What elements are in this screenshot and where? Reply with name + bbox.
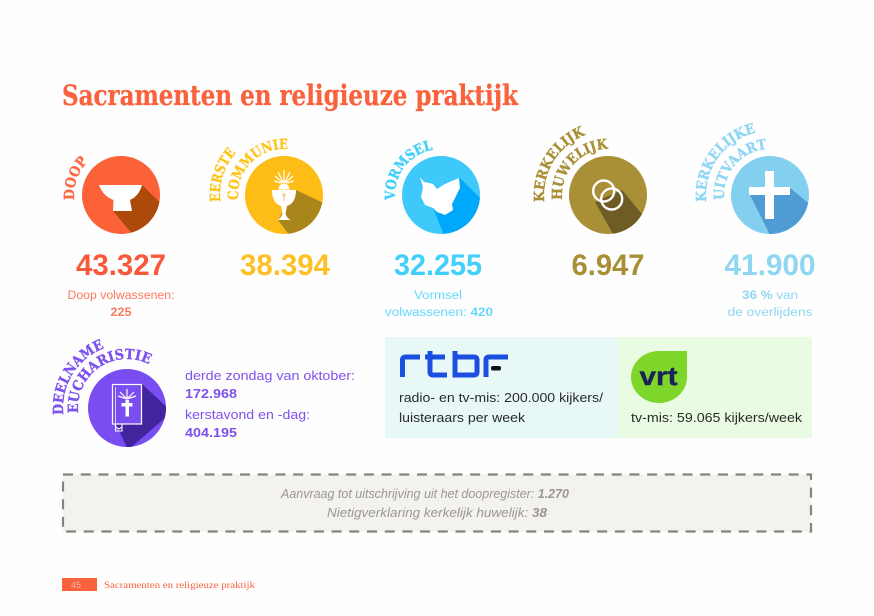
callout: doopregister en nietigverklaring: Aanvraag tot uitschrijving uit het doopregister: 1.270: [280, 487, 569, 501]
icon: chalice: [245, 156, 323, 234]
note: vormsel volwassenen: [385, 290, 493, 319]
icon: vrt logo: vrt: [640, 361, 678, 391]
panel: kerkelijke uitvaart: [696, 122, 816, 319]
icon: vrt logo: [631, 351, 687, 403]
note: percentage overlijdens: 36 % van: [742, 290, 798, 302]
number: kerkelijk huwelijk: 6.947: [572, 249, 644, 282]
icon: dove: [402, 156, 480, 234]
text: rtbf figures: luisteraars per week: [399, 410, 526, 425]
number: doop: 43.327: [76, 249, 166, 282]
text: rtbf figures: radio- en tv-mis: 200.000 kijkers/: [399, 390, 603, 405]
footer: 45: [71, 580, 81, 590]
label: deelname eucharistie: EUCHARISTIE: [68, 348, 152, 413]
note: percentage overlijdens: [728, 290, 813, 319]
panel: kerkelijk huwelijk: [534, 126, 647, 282]
callout: doopregister en nietigverklaring: Nietigverklaring kerkelijk huwelijk: 38: [327, 506, 547, 520]
footer: [62, 578, 256, 591]
text: attendance figures: 404.195: [185, 425, 237, 440]
panel: vormsel: [384, 140, 493, 319]
number: eerste communie: 38.394: [240, 249, 330, 282]
panel: eerste communie: [210, 138, 330, 282]
label: kerkelijk huwelijk: KERKELIJK: [534, 126, 586, 202]
text: vrt figures: tv-mis: 59.065 kijkers/week: [631, 410, 803, 425]
icon: cross: [731, 156, 809, 234]
note: vormsel volwassenen: Vormsel: [414, 290, 462, 302]
title: Sacramenten en religieuze praktijk: [62, 79, 518, 112]
text: attendance figures: derde zondag van oktober:: [185, 368, 355, 383]
label: kerkelijk huwelijk: [534, 126, 608, 202]
label: eerste communie: EERSTE: [210, 146, 236, 202]
panel: deelname eucharistie: [52, 338, 355, 447]
text: rtbf figures: [399, 390, 603, 425]
panel: vrt: [618, 337, 812, 438]
note: doop volwassenen: Doop volwassenen:: [68, 290, 174, 302]
text: attendance figures: [185, 368, 355, 440]
panel: rtbf: [385, 337, 618, 438]
note: vormsel volwassenen: volwassenen: 420: [385, 307, 493, 319]
label: kerkelijke uitvaart: UITVAART: [714, 138, 766, 200]
label: vormsel: VORMSEL: [384, 140, 433, 200]
label: kerkelijk huwelijk: HUWELIJK: [552, 138, 608, 200]
callout: doopregister en nietigverklaring: [63, 474, 811, 532]
panel: doop: [64, 156, 174, 319]
number: kerkelijke uitvaart: 41.900: [724, 249, 816, 282]
note: percentage overlijdens: de overlijdens: [728, 307, 813, 319]
icon: rtbf logo: [402, 351, 508, 377]
text: attendance figures: kerstavond en -dag:: [185, 407, 310, 422]
footer: Sacramenten en religieuze praktijk: [104, 580, 256, 590]
number: vormsel: 32.255: [394, 249, 482, 282]
label: deelname eucharistie: DEELNAME: [52, 338, 104, 414]
icon: rings: [569, 156, 647, 234]
note: doop volwassenen: 225: [110, 307, 132, 319]
text: attendance figures: 172.968: [185, 386, 237, 401]
label: eerste communie: COMMUNIE: [227, 138, 288, 200]
label: doop: DOOP: [64, 156, 86, 200]
label: kerkelijke uitvaart: KERKELIJKE: [696, 122, 756, 202]
note: doop volwassenen: [68, 290, 174, 319]
icon: bible: [88, 369, 166, 447]
icon: baptismal font: [82, 156, 160, 234]
